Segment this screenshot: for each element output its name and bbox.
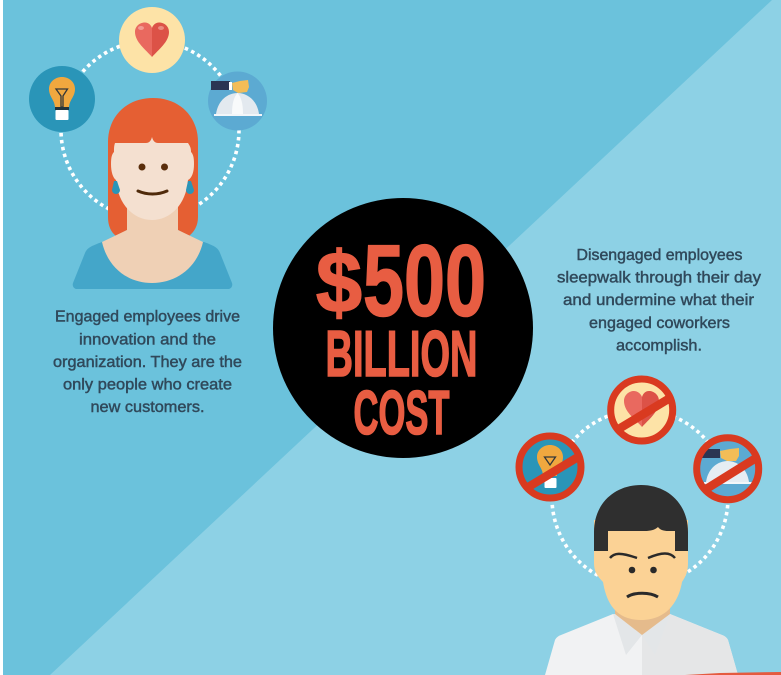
text: engaged employees: only people who create xyxy=(63,376,232,394)
text: disengaged employees: and undermine what their xyxy=(563,292,755,309)
disengaged employee illustration xyxy=(518,378,760,675)
$500 headline: $ xyxy=(316,235,362,331)
icon: heart xyxy=(119,7,185,73)
text: engaged employees: innovation and the xyxy=(79,332,216,348)
text: engaged employees: Engaged employees drive xyxy=(55,308,240,326)
engaged employee illustration xyxy=(29,7,267,289)
icon: light bulb xyxy=(29,66,95,132)
text: engaged employees: organization. They are the xyxy=(53,354,242,371)
text: disengaged employees xyxy=(557,247,761,354)
text: engaged employees xyxy=(53,308,242,416)
$500 headline: 500 xyxy=(363,226,486,338)
text: disengaged employees: Disengaged employees xyxy=(576,247,742,264)
red footer strip xyxy=(685,672,781,675)
text: disengaged employees: engaged coworkers xyxy=(589,315,730,332)
text: disengaged employees: sleepwalk through their day xyxy=(557,270,761,286)
$500 headline xyxy=(316,226,486,338)
man figure xyxy=(545,485,738,675)
cost label: COST xyxy=(354,379,450,448)
icon: banned light bulb xyxy=(518,435,582,499)
central cost badge xyxy=(273,198,533,458)
icon: banned serving cloche xyxy=(696,437,760,501)
icon: banned heart xyxy=(610,378,674,442)
icon: serving cloche xyxy=(208,72,267,130)
billion label: BILLION xyxy=(326,317,478,390)
text: engaged employees: new customers. xyxy=(90,399,204,416)
text: disengaged employees: accomplish. xyxy=(616,338,702,354)
woman figure xyxy=(73,98,232,289)
